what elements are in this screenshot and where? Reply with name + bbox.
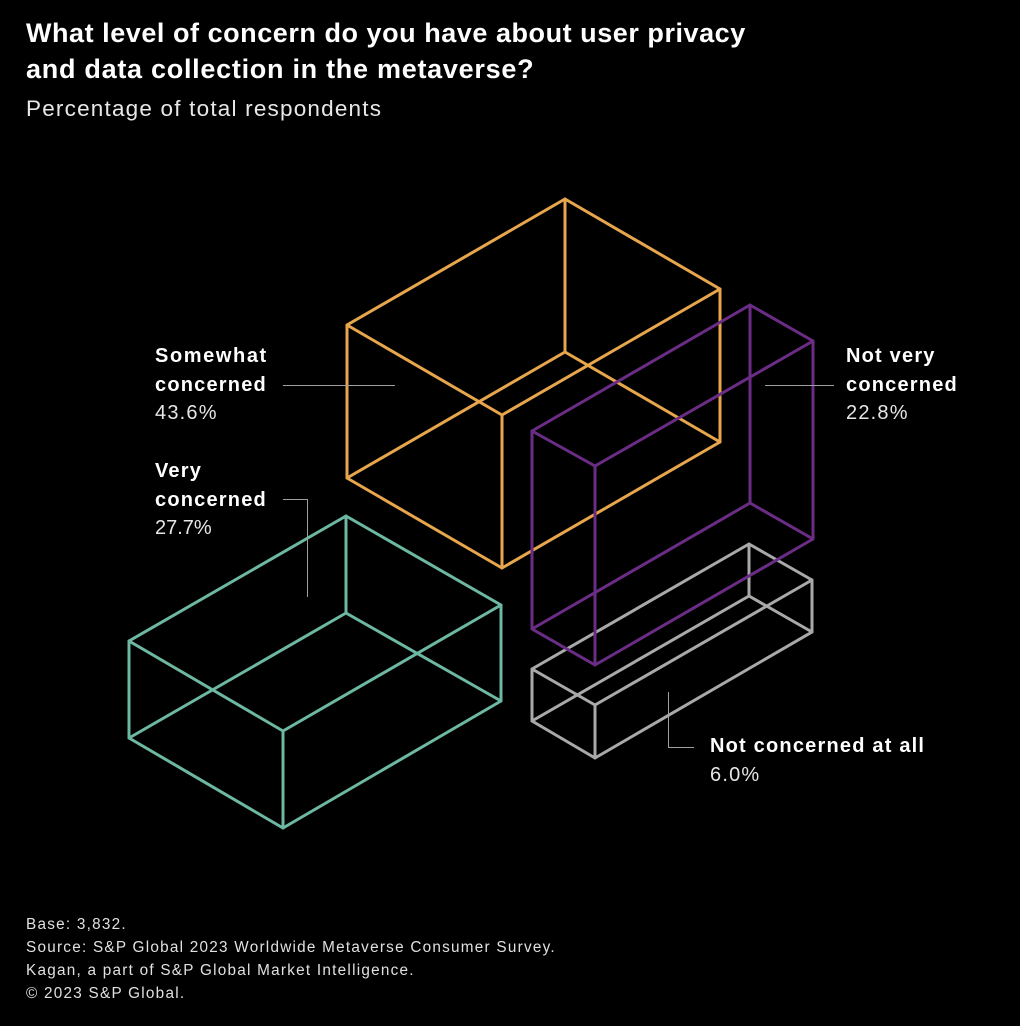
label: not very concerned: Not very xyxy=(846,345,936,367)
leader lines xyxy=(283,386,834,748)
box: not concerned at all xyxy=(532,544,812,758)
subtitle: Percentage of total respondents xyxy=(26,96,382,121)
label: somewhat concerned: 43.6% xyxy=(155,402,218,424)
title xyxy=(26,18,746,84)
label: very concerned: 27.7% xyxy=(155,517,212,539)
label: somewhat concerned: concerned xyxy=(155,374,267,396)
label: not very concerned xyxy=(846,345,958,424)
label: not concerned at all xyxy=(710,735,925,786)
label: not concerned at all: 6.0% xyxy=(710,764,760,786)
footer source notes xyxy=(26,916,556,1002)
footer source notes: © 2023 S&P Global. xyxy=(26,985,185,1002)
label: somewhat concerned xyxy=(155,345,268,424)
footer source notes: Kagan, a part of S&P Global Market Intelligence. xyxy=(26,962,415,979)
label: not concerned at all: Not concerned at all xyxy=(710,735,925,757)
label: very concerned: Very xyxy=(155,460,202,482)
label: very concerned xyxy=(155,460,267,539)
label: not very concerned: concerned xyxy=(846,374,958,396)
footer source notes: Source: S&P Global 2023 Worldwide Metaverse Consumer Survey. xyxy=(26,939,556,956)
label: not very concerned: 22.8% xyxy=(846,402,909,424)
box: not very concerned xyxy=(532,305,813,665)
label: very concerned: concerned xyxy=(155,488,267,510)
label: somewhat concerned: Somewhat xyxy=(155,345,268,367)
title: What level of concern do you have about user privacy xyxy=(26,18,746,48)
box: somewhat concerned xyxy=(347,199,720,568)
box: very concerned xyxy=(129,516,501,828)
footer source notes: Base: 3,832. xyxy=(26,916,127,933)
title: and data collection in the metaverse? xyxy=(26,54,534,84)
